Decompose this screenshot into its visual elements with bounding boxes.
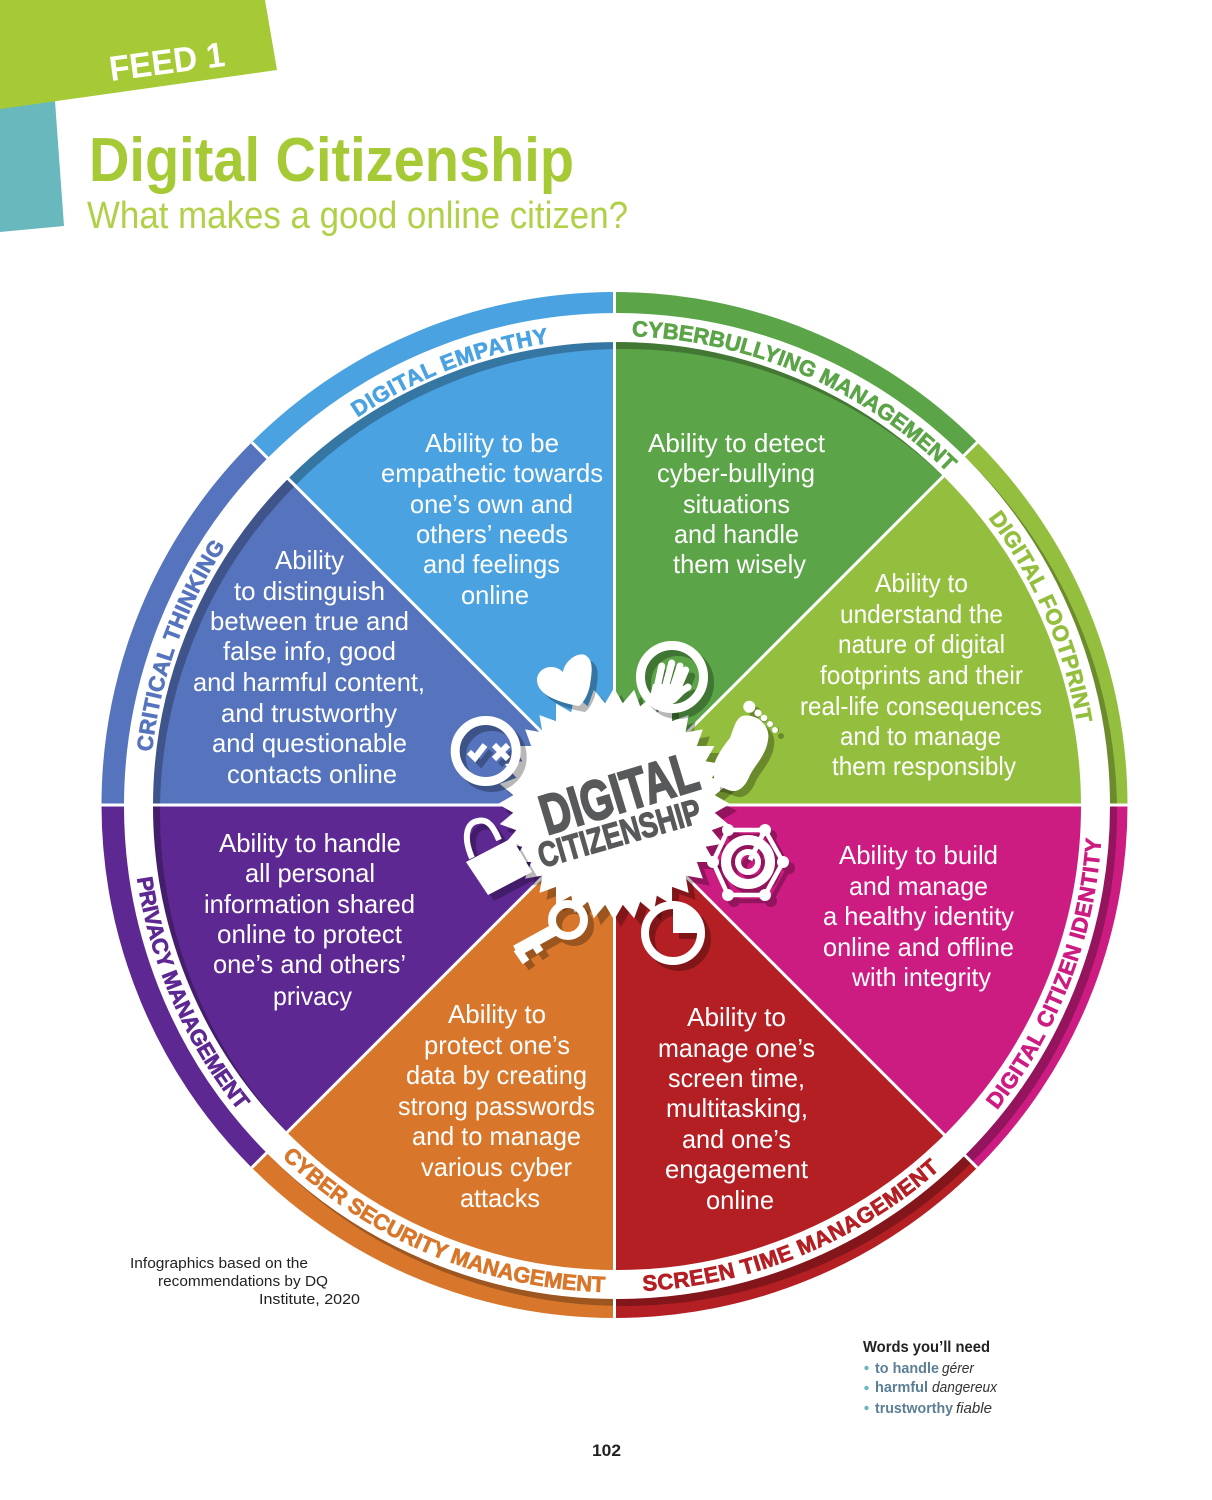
panel: screen time management: engagement bbox=[665, 1154, 809, 1184]
glossary: to handle bbox=[875, 1361, 939, 1377]
panel: cyber security management bbox=[252, 805, 615, 1318]
panel: cyber security management: strong passwords bbox=[398, 1091, 595, 1121]
panel: critical thinking: and questionable bbox=[212, 728, 407, 758]
label: cyberbullying management: CYBERBULLYING MANAGEMENT bbox=[632, 320, 958, 470]
panel: digital footprint bbox=[614, 442, 1128, 805]
panel: cyber security management: Ability to bbox=[448, 999, 546, 1029]
panel: critical thinking: and trustworthy bbox=[221, 698, 397, 728]
panel: digital citizen identity bbox=[614, 805, 1128, 1168]
source note bbox=[130, 1255, 360, 1308]
ring shadow bbox=[146, 334, 1102, 1292]
icon: padlock bbox=[466, 820, 538, 901]
panel: cyber security management: attacks bbox=[460, 1183, 540, 1213]
panel: digital empathy: empathetic towards bbox=[381, 458, 603, 488]
panel: critical thinking: false info, good bbox=[223, 636, 396, 666]
panel: digital footprint: footprints and their bbox=[820, 660, 1023, 690]
banner label: FEED 1 bbox=[107, 35, 227, 89]
icon: hand bbox=[640, 646, 710, 714]
icon: check and cross bbox=[455, 720, 522, 788]
panel: digital footprint: real-life consequences bbox=[800, 691, 1042, 721]
panel: screen time management bbox=[614, 805, 977, 1318]
glossary: fiable bbox=[956, 1401, 992, 1417]
label: privacy management: PRIVACY MANAGEMENT bbox=[136, 876, 251, 1108]
panel: privacy management: one’s and others’ bbox=[213, 949, 406, 979]
panel: digital citizen identity: Ability to build bbox=[839, 840, 998, 870]
panel: cyberbullying management: them wisely bbox=[673, 549, 806, 579]
starburst bbox=[498, 651, 767, 938]
panel: privacy management bbox=[102, 805, 614, 1168]
panel: critical thinking bbox=[102, 442, 614, 805]
panel: digital footprint: understand the bbox=[840, 599, 1003, 629]
wheel bbox=[102, 292, 1128, 1318]
center title: DIGITAL bbox=[532, 739, 706, 846]
panel: cyber security management: data by creating bbox=[406, 1060, 587, 1090]
source note: recommendations by DQ bbox=[158, 1273, 328, 1290]
panel: cyber security management: protect one’s bbox=[424, 1030, 570, 1060]
glossary: dangereux bbox=[932, 1380, 998, 1396]
icon: footprint bbox=[714, 701, 784, 797]
glossary: gérer bbox=[942, 1361, 975, 1377]
panel: cyberbullying management: Ability to detect bbox=[648, 428, 826, 458]
icon: target bbox=[707, 824, 795, 907]
title: Digital Citizenship bbox=[89, 126, 574, 195]
panel: digital empathy: one’s own and bbox=[410, 489, 573, 519]
starburst shadow bbox=[505, 658, 774, 945]
panel: digital citizen identity: with integrity bbox=[851, 962, 991, 992]
panel: digital footprint: and to manage bbox=[840, 721, 1001, 751]
panel: digital empathy: Ability to be bbox=[425, 428, 559, 458]
panel: digital empathy: others’ needs bbox=[416, 519, 568, 549]
panel: digital footprint: nature of digital bbox=[838, 629, 1005, 659]
panel: digital citizen identity: a healthy identity bbox=[823, 901, 1014, 931]
glossary bbox=[863, 1339, 998, 1417]
teal tab bbox=[0, 101, 64, 232]
glossary: Words you’ll need bbox=[863, 1339, 990, 1356]
white label ring bbox=[138, 328, 1096, 1284]
subtitle: What makes a good online citizen? bbox=[87, 195, 628, 237]
panel: critical thinking: between true and bbox=[210, 606, 409, 636]
icon: heart bbox=[537, 654, 598, 712]
panel: critical thinking: contacts online bbox=[227, 759, 397, 789]
panel: critical thinking: and harmful content, bbox=[193, 667, 425, 697]
panel: screen time management: and one’s bbox=[682, 1124, 791, 1154]
center title: CITIZENSHIP bbox=[533, 792, 706, 876]
icon: clock bbox=[645, 905, 707, 967]
label: cyber security management: CYBER SECURITY MANAGEMENT bbox=[284, 1148, 606, 1292]
panel: cyberbullying management: cyber-bullying bbox=[657, 458, 815, 488]
panel: privacy management: privacy bbox=[273, 981, 352, 1011]
panel: screen time management: multitasking, bbox=[666, 1093, 808, 1123]
panel: critical thinking: to distinguish bbox=[234, 576, 385, 606]
icon: key bbox=[516, 904, 590, 968]
panel: cyber security management: various cyber bbox=[421, 1152, 572, 1182]
panel: cyberbullying management: and handle bbox=[674, 519, 799, 549]
panel: cyber security management: and to manage bbox=[412, 1121, 581, 1151]
label: critical thinking: CRITICAL THINKING bbox=[137, 540, 224, 751]
glossary: trustworthy bbox=[875, 1401, 953, 1417]
panel: screen time management: manage one’s bbox=[658, 1033, 815, 1063]
panel: screen time management: online bbox=[706, 1185, 774, 1215]
panel: critical thinking: Ability bbox=[275, 545, 344, 575]
panel: privacy management: online to protect bbox=[217, 919, 403, 949]
label: digital citizen identity: DIGITAL CITIZEN IDENTITY bbox=[985, 837, 1102, 1110]
panel: digital empathy: and feelings bbox=[423, 549, 560, 579]
page number: 102 bbox=[592, 1441, 621, 1460]
panel: digital citizen identity: and manage bbox=[849, 871, 988, 901]
panel: screen time management: Ability to bbox=[687, 1002, 786, 1032]
panel: cyberbullying management: situations bbox=[683, 489, 790, 519]
panel: digital citizen identity: online and offline bbox=[823, 932, 1014, 962]
wedge dividers bbox=[102, 292, 1128, 1318]
source note: Infographics based on the bbox=[130, 1255, 308, 1272]
glossary: harmful bbox=[875, 1380, 928, 1396]
panel: privacy management: information shared bbox=[204, 889, 415, 919]
panel: privacy management: Ability to handle bbox=[219, 828, 401, 858]
label: digital footprint: DIGITAL FOOTPRINT bbox=[988, 510, 1092, 722]
center title bbox=[532, 739, 706, 876]
green tab bbox=[0, 0, 277, 109]
banner: FEED 1 bbox=[0, 0, 277, 232]
label: screen time management: SCREEN TIME MANAGEMENT bbox=[642, 1157, 936, 1292]
panel: digital empathy: online bbox=[461, 580, 529, 610]
panel: digital footprint: Ability to bbox=[875, 568, 968, 598]
panel: cyberbullying management bbox=[614, 292, 977, 805]
panel: screen time management: screen time, bbox=[668, 1063, 805, 1093]
panel: privacy management: all personal bbox=[245, 858, 375, 888]
panel: digital footprint: them responsibly bbox=[832, 751, 1016, 781]
panel: digital empathy bbox=[252, 292, 615, 805]
source note: Institute, 2020 bbox=[259, 1291, 360, 1308]
label: digital empathy: DIGITAL EMPATHY bbox=[350, 328, 546, 418]
